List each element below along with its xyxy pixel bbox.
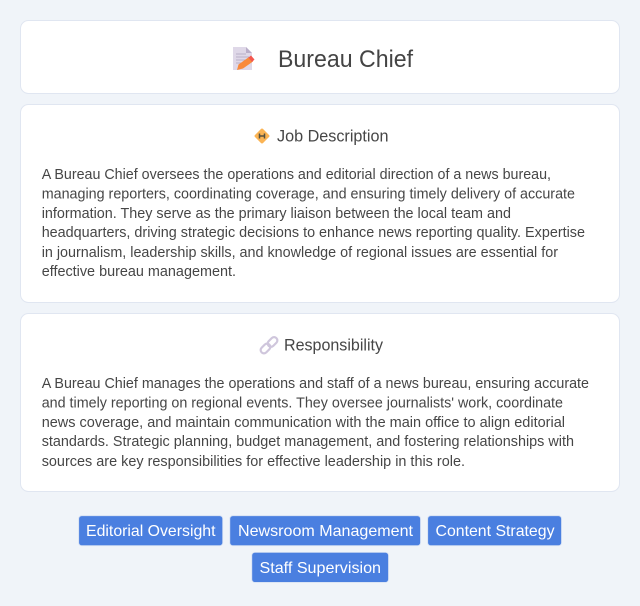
- tag: newsroom management: [230, 516, 420, 546]
- text block: responsibility: sources are key responsibilities for effective leadership in this role.: [42, 454, 465, 470]
- title: Bureau Chief: [278, 46, 413, 73]
- text block: responsibility: standards. Strategic planning, budget management, and fostering relationships with: [42, 434, 574, 450]
- text block: responsibility: news coverage, and maintain communication with the main office to align editorial: [42, 415, 565, 431]
- icon: memo with pencil: [233, 47, 254, 70]
- tag: content strategy: Content Strategy: [436, 523, 554, 540]
- tag: staff supervision: Staff Supervision: [260, 560, 381, 577]
- tags: [79, 516, 561, 582]
- icon: link: [259, 336, 279, 355]
- text block: job description: effective bureau management.: [42, 264, 236, 280]
- panel: job description: [20, 104, 620, 302]
- text block: job description: [42, 167, 585, 280]
- text block: job description: in journalism, leadership skills, and knowledge of regional issues are essential for: [42, 245, 558, 261]
- text block: responsibility: and timely reporting on regional events. They oversee journalists' work, coordinate: [42, 395, 563, 411]
- text block: job description: managing reporters, coordinating coverage, and ensuring timely delivery of accurate: [42, 186, 575, 202]
- tag: editorial oversight: Editorial Oversight: [86, 523, 216, 540]
- icon: construction diamond: [254, 128, 270, 144]
- tag: newsroom management: Newsroom Management: [238, 523, 414, 540]
- text block: job description: information. They serve as the primary liaison between the local team and: [42, 206, 511, 222]
- text block: responsibility: A Bureau Chief manages the operations and staff of a news bureau, ensuring accurate: [42, 376, 589, 392]
- panel: responsibility: [20, 314, 620, 492]
- tag: staff supervision: [252, 552, 388, 582]
- text block: job description: A Bureau Chief oversees the operations and editorial direction of a news bureau,: [42, 167, 551, 183]
- heading: job description: Job Description: [277, 128, 388, 146]
- tag: content strategy: [428, 516, 562, 546]
- heading: responsibility: Responsibility: [284, 336, 384, 354]
- text block: job description: headquarters, driving strategic decisions to enhance news reporting quality. Expertise: [42, 225, 585, 241]
- text block: responsibility: [42, 376, 589, 470]
- tag: editorial oversight: [79, 516, 223, 546]
- panel: title card: [20, 20, 620, 94]
